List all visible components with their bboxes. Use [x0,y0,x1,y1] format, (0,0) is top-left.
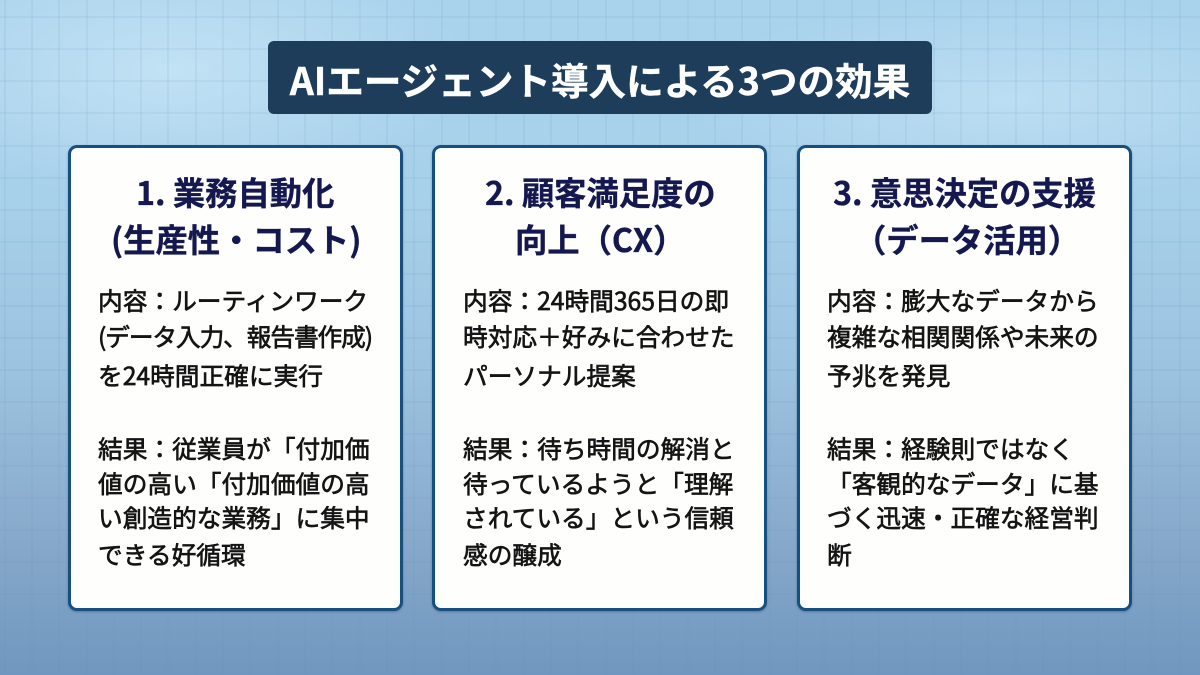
text: 結果: 結果：従業員が「付加価 [98,430,370,466]
text: 結果 4行目: 感の醸成 [463,536,562,572]
text: 結果: 結果：待ち時間の解消と [463,430,735,466]
text: 結果 2行目: 待っているようと「理解 [463,465,733,501]
text: 結果 3行目: い創造的な業務」に集中 [98,499,370,535]
heading: 向上（CX）: 向上（CX） [515,216,685,262]
text: 結果: 結果：経験則ではなく [827,430,1074,466]
text: 内容 3行目: 予兆を発見 [827,357,950,393]
panel: 顧客満足度 [432,145,767,611]
text: 内容 2行目: (データ入力、報告書作成) [98,318,372,354]
text: 結果 3行目: づく迅速・正確な経営判 [827,499,1099,535]
heading: 顧客満足度の: 2. 顧客満足度の [485,169,716,215]
heading: データ活用: （データ活用） [854,216,1080,262]
text: 結果 2行目: 「客観的なデータ」に基 [827,465,1099,501]
title: AIエージェント導入による3つの効果 [290,51,910,106]
heading: 業務自動化: 1. 業務自動化 [136,169,334,215]
text: 結果 4行目: できる好循環 [98,536,246,572]
text: 内容 3行目: を24時間正確に実行 [98,357,323,393]
panel: 業務自動化 [68,145,403,611]
text: 内容: 内容：24時間365日の即 [463,282,729,318]
heading: 生産性・コスト: (生産性・コスト) [111,216,362,262]
text: 結果 2行目: 値の高い「付加価値の高 [98,465,370,501]
text: 結果 3行目: されている」という信頼 [463,499,734,535]
text: 結果 4行目: 断 [827,536,852,572]
text: 内容 2行目: 時対応＋好みに合わせた [463,318,735,354]
text: 内容 2行目: 複雑な相関関係や未来の [827,318,1099,354]
panel: 意思決定の支援 [797,145,1132,611]
text: 内容 3行目: パーソナル提案 [463,357,636,393]
heading: 意思決定の支援: 3. 意思決定の支援 [833,169,1096,215]
text: 内容: 内容：膨大なデータから [827,282,1099,318]
text: 内容: 内容：ルーティンワーク [98,282,368,318]
